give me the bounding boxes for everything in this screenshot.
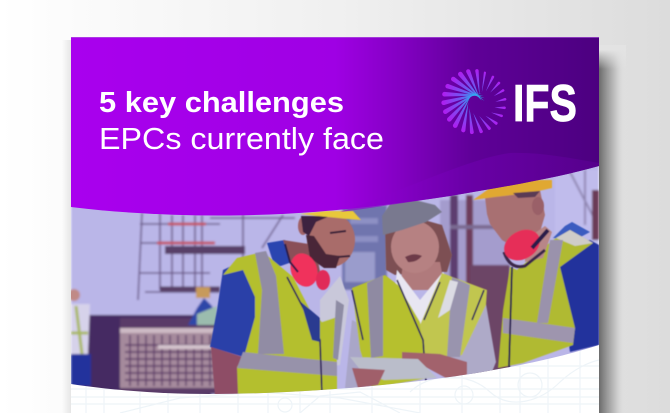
title — [99, 87, 384, 156]
map line pattern — [71, 350, 599, 413]
worker: woman with tablet — [345, 200, 496, 388]
worker: right man — [473, 180, 599, 368]
worker: left man — [210, 211, 361, 396]
scaffolding — [138, 213, 295, 300]
document sheet — [71, 37, 599, 413]
document shadow — [62, 40, 626, 413]
icon: radial swirl — [441, 69, 507, 134]
background construction site — [68, 160, 599, 400]
left worker — [71, 304, 90, 354]
purple header banner — [71, 37, 599, 216]
title: EPCs currently face — [99, 121, 384, 156]
distant worker — [188, 298, 218, 325]
logo wordmark: IFS — [513, 75, 577, 133]
title: 5 key challenges — [99, 87, 344, 119]
IFS logo — [441, 69, 577, 134]
photo: construction workers — [68, 160, 599, 400]
crate — [120, 328, 220, 388]
